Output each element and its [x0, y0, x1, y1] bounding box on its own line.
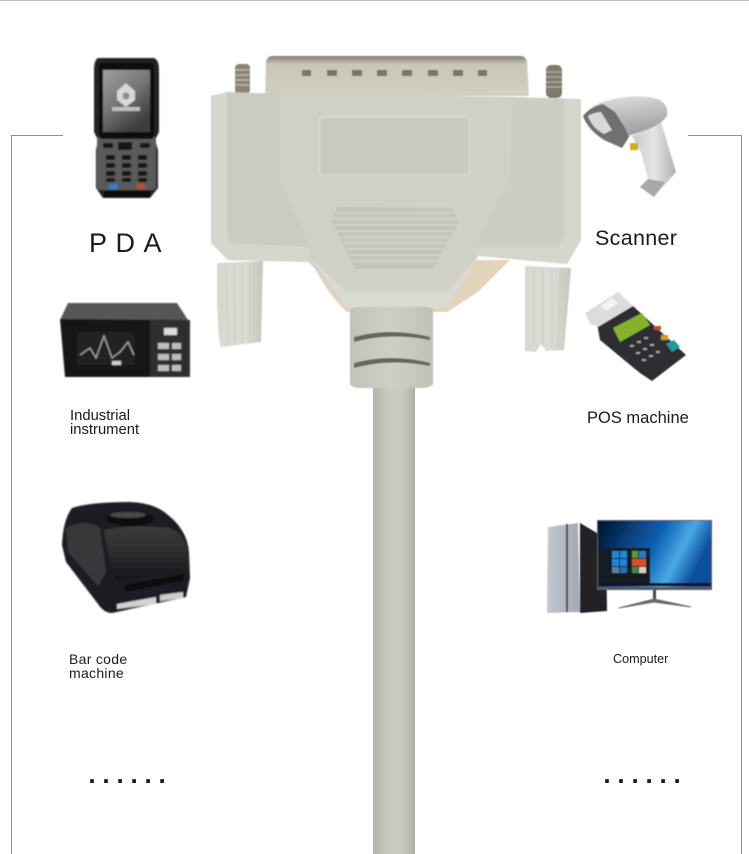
- strain relief: [350, 307, 433, 388]
- label: PDA: PDA: [89, 228, 170, 258]
- icon: POS machine: [585, 292, 686, 381]
- icon: bar code machine: [62, 502, 190, 613]
- housing right face: [473, 97, 564, 247]
- right frame line: [688, 136, 742, 854]
- label recess: [320, 117, 470, 175]
- left ellipsis: ......: [88, 759, 173, 789]
- DB25 connector: [211, 56, 581, 388]
- housing shadow: [270, 260, 510, 312]
- label: POS machine: POS machine: [587, 409, 689, 427]
- housing right bevel: [473, 99, 581, 264]
- icon: computer: [547, 520, 712, 613]
- right ellipsis: ......: [603, 759, 688, 789]
- metal shell with pins: [265, 56, 529, 96]
- housing left face: [227, 92, 310, 247]
- label: Bar code machine: machine: [69, 665, 124, 681]
- label: Scanner: Scanner: [595, 226, 677, 250]
- housing: [211, 92, 581, 308]
- left screw: [235, 64, 250, 94]
- label: Computer: Computer: [613, 652, 668, 666]
- lower bevel: [310, 256, 478, 308]
- icon: scanner: [583, 96, 676, 197]
- top edge line: [0, 0, 749, 1]
- housing left bevel: [211, 92, 310, 262]
- ribbed grip: [332, 207, 459, 269]
- cable: [373, 380, 415, 854]
- icon: industrial instrument: [60, 303, 190, 377]
- label: Industrial instrument: Industrial: [70, 408, 130, 424]
- right thumbscrew: [525, 266, 571, 352]
- icon: PDA: [94, 58, 159, 198]
- left thumbscrew: [217, 261, 263, 347]
- centre panel: [279, 94, 512, 292]
- right screw: [546, 65, 562, 98]
- left frame line: [12, 136, 63, 854]
- label: Industrial instrument: instrument: [70, 422, 139, 438]
- label: Bar code machine: Bar code: [69, 651, 127, 667]
